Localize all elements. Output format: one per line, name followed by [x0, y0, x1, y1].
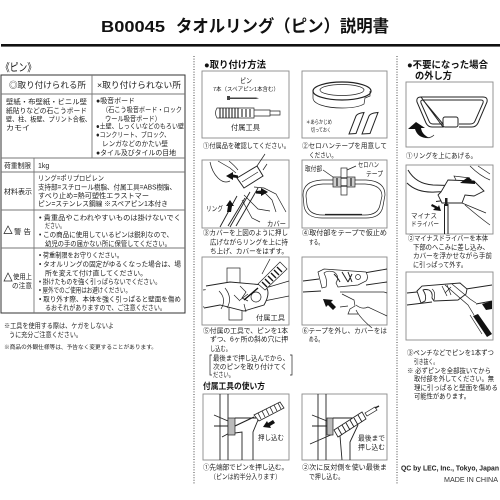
- panel: step 4 tape tack: テープ: [366, 170, 383, 178]
- icon: arrows: [431, 177, 475, 211]
- load limit row: 1kg: [38, 163, 49, 170]
- load limit row: [4, 161, 49, 170]
- usage notes row: • 屋外でのご使用はお避けください。: [39, 286, 131, 294]
- panel: step 3 remove cover: カバー: [267, 220, 286, 228]
- caption step 1: ①付属品を確認してください。: [203, 141, 290, 150]
- non-mountable surfaces: ●吸音ボード: [96, 96, 135, 105]
- mountable surfaces: カモイ: [6, 124, 30, 132]
- warning row: 警 告: [14, 227, 31, 236]
- mountable surfaces: 壁、柱、板壁、プリント合板、: [6, 114, 91, 124]
- callout: ださい。: [213, 371, 234, 379]
- icon: arrow: [323, 299, 336, 310]
- caption removal 2: ②マイナスドライバーを本体: [408, 234, 488, 242]
- panel: step 4 tape tack: [302, 160, 387, 228]
- caption step 6: ⑥テープを外し、カバーをは: [302, 326, 387, 335]
- non-mountable surfaces: ●土壁、しっくいなどのもろい壁: [96, 122, 184, 130]
- icon: arrows: [226, 172, 268, 212]
- usage notes row: • 取り外す際、本体を強く引っぱると壁面を傷め: [39, 294, 181, 304]
- caption removal 1: ①リングを上にあげる。: [406, 151, 477, 160]
- caption step 5: ずつ、6ヶ所の斜め穴に押: [210, 334, 288, 344]
- usage notes row: の注意: [12, 281, 32, 290]
- caption tool usage 2: ②次に反対側を使い最後ま: [302, 462, 387, 472]
- warning row: • 貴重品やこわれやすいものは掛けないでく: [39, 213, 181, 222]
- caption step 2: ②セロハンテープを用意して: [302, 141, 387, 150]
- title: B00045: [101, 19, 165, 36]
- caption step 3: ③カバーを上図のように押し: [203, 228, 288, 237]
- caption tool usage 2: で押し込む。: [309, 472, 344, 481]
- caption removal 3: ※ 必ずピンを全部抜いてから: [407, 366, 491, 375]
- non-mountable surfaces: [96, 96, 184, 157]
- panel: step 4 tape tack: セロハン: [358, 161, 379, 169]
- usage notes row: • タオルリングの固定がゆるくなった場合は、場: [39, 260, 181, 268]
- panel: removal 2: [406, 165, 493, 234]
- callout: 最後まで押し込んでから、: [213, 354, 289, 362]
- icon: curved arrow: [408, 122, 430, 138]
- warning row: • この商品に使用しているピンは鋭利なので、: [39, 230, 173, 239]
- panel: tool usage 1: [203, 394, 289, 460]
- panel: tool usage 1: 押し込む: [258, 433, 284, 442]
- caption removal 3: 可能性があります。: [414, 392, 470, 400]
- panel: removal 3: [406, 272, 493, 340]
- title: タオルリング（ピン）説明書: [176, 16, 389, 36]
- mountable surfaces: 紙貼りなどの石こうボード: [6, 106, 87, 115]
- company credit: [401, 464, 499, 484]
- materials row: 支持部=スチロール樹脂、付属工具=ABS樹脂、: [38, 182, 176, 192]
- icon: towel ring: [303, 180, 385, 218]
- caption removal 3: 引き抜く。: [414, 357, 438, 366]
- warning row: [4, 213, 181, 248]
- caption step 4: する。: [309, 238, 323, 246]
- panel: tool usage 2: 最後まで: [358, 434, 385, 442]
- panel: step 5 push pins: [202, 257, 289, 325]
- caption step 6: [302, 326, 387, 344]
- caption step 4: [302, 228, 387, 246]
- table header: mountable: ◎取り付けられる所: [9, 80, 86, 90]
- caption step 3: ち上げ、カバーをはずす。: [210, 246, 288, 256]
- panel: removal 1: [406, 82, 493, 147]
- panel: specification table: [1, 75, 185, 313]
- footnotes: [4, 321, 157, 351]
- icon: ring: [417, 97, 487, 127]
- non-mountable surfaces: レンガなどのかたい壁: [102, 139, 168, 148]
- heading: removal: ●不要になった場合: [407, 59, 488, 71]
- caption removal 2: [408, 234, 492, 269]
- table header: not mountable: ×取り付けられない所: [97, 80, 182, 90]
- heading: removal: [407, 59, 488, 82]
- panel: step 1 parts: ピン: [240, 77, 252, 85]
- usage notes row: [4, 250, 181, 312]
- panel: step 3 remove cover: リング: [206, 204, 223, 213]
- usage notes row: るおそれがありますので、ご注意ください。: [45, 303, 166, 312]
- caption tool usage 1: （ピンは約半分入ります）: [210, 472, 281, 481]
- caption step 5: し込む。: [210, 345, 231, 353]
- icon: tool: [216, 108, 280, 118]
- caption removal 3: [407, 348, 498, 400]
- heading: installation method: ●取り付け方法: [204, 59, 266, 71]
- usage notes row: • 掛けたものを強く引っぱらないでください。: [39, 277, 161, 286]
- panel: tool usage 2: [302, 394, 387, 460]
- caption step 3: 広げながらリングを上に持: [210, 238, 288, 246]
- caption removal 2: に引っぱって外す。: [413, 260, 467, 269]
- mountable surfaces: 壁紙・布壁紙・ビニル壁: [6, 97, 87, 106]
- icon: pliers: [445, 284, 492, 337]
- panel: step 5 push pins: 付属工具: [256, 313, 285, 322]
- usage notes row: • 荷重制限をお守りください。: [39, 250, 123, 260]
- panel: step 1 parts: 付属工具: [231, 122, 260, 132]
- callout: 次のピンを取り付けてく: [213, 362, 287, 371]
- caption step 4: ④取付部をテープで仮止め: [302, 228, 387, 237]
- usage notes row: 使用上: [13, 272, 32, 281]
- heading: removal: の外し方: [415, 70, 452, 82]
- non-mountable surfaces: ウール吸音ボード）: [105, 114, 161, 123]
- panel: step 2 tape: [302, 71, 387, 138]
- caption tool usage 1: [203, 462, 288, 481]
- panel: step 3 remove cover: [202, 154, 289, 228]
- materials row: リング=ポリプロピレン: [38, 174, 104, 182]
- panel: step 2 tape: 切っておく: [311, 127, 331, 134]
- materials row: 材料表示: [4, 187, 32, 196]
- caption removal 3: ③ペンチなどでピンを1本ずつ: [407, 348, 494, 357]
- non-mountable surfaces: ●コンクリート、ブロック、: [96, 130, 170, 139]
- materials row: [4, 174, 176, 208]
- callout: [210, 354, 292, 379]
- panel: removal 2: ドライバー: [411, 220, 439, 228]
- icon: tool reversed: [334, 406, 379, 437]
- caption step 5: ⑤付属の工具で、ピンを1本: [203, 326, 288, 335]
- caption removal 2: カバーを浮かせながら手前: [413, 251, 492, 260]
- caption step 2: ください。: [309, 152, 337, 160]
- icon: arrow: [263, 420, 275, 428]
- icon: pin: [227, 96, 259, 100]
- footnotes: ※工具を使用する際は、ケガをしないよ: [4, 321, 114, 330]
- caption removal 2: 下部のへこみに差し込み、: [413, 242, 489, 252]
- caption step 2: [302, 141, 387, 160]
- panel: step 1 parts: [202, 71, 289, 138]
- icon: tape roll: [313, 82, 371, 108]
- caption step 6: める。: [309, 336, 323, 344]
- panel: step 1 parts: 7本（スペアピン1本含む）: [213, 85, 279, 93]
- load limit row: 荷重制限: [4, 161, 31, 170]
- panel: tool usage 2: 押し込む: [358, 442, 385, 452]
- title: [101, 16, 389, 36]
- usage notes row: 所を変えて付け直してください。: [45, 268, 147, 278]
- caption tool usage 1: ①先端部でピンを押し込む。: [203, 462, 288, 472]
- footnotes: ※商品の外観仕様等は、予告なく変更することがあります。: [4, 343, 157, 351]
- heading: tool usage: 付属工具の使い方: [203, 381, 265, 391]
- mountable surfaces: [6, 97, 91, 132]
- warning row: ださい。: [45, 222, 65, 230]
- panel: removal 2: マイナス: [411, 212, 437, 220]
- caption tool usage 2: [302, 462, 387, 481]
- non-mountable surfaces: ●タイル及びタイルの目地: [96, 148, 176, 157]
- panel: step 2 tape: ＊あらかじめ: [306, 119, 332, 126]
- caption step 3: [203, 228, 288, 256]
- icon: tool: [235, 402, 284, 426]
- panel: step 4 tape tack: 取付部: [305, 164, 322, 173]
- icon: tape and mount: [333, 168, 355, 195]
- materials row: ピン=ステンレス鋼線 ※スペアピン1本付き: [38, 199, 168, 208]
- icon: cut tape: [349, 112, 378, 134]
- icon: tool handle: [244, 259, 287, 312]
- heading: pin: 《ピン》: [1, 61, 36, 74]
- non-mountable surfaces: （石こう吸音ボード・ロック: [102, 105, 182, 114]
- company credit: MADE IN CHINA: [444, 477, 498, 484]
- warning row: 幼児の手の届かない所に保管してください。: [45, 239, 171, 248]
- caption step 5: [203, 326, 288, 353]
- panel: step 6 replace cover: [302, 257, 387, 328]
- materials row: すべり止め=熱可塑性エラストマー: [38, 191, 149, 200]
- footnotes: うに充分ご注意ください。: [9, 330, 82, 339]
